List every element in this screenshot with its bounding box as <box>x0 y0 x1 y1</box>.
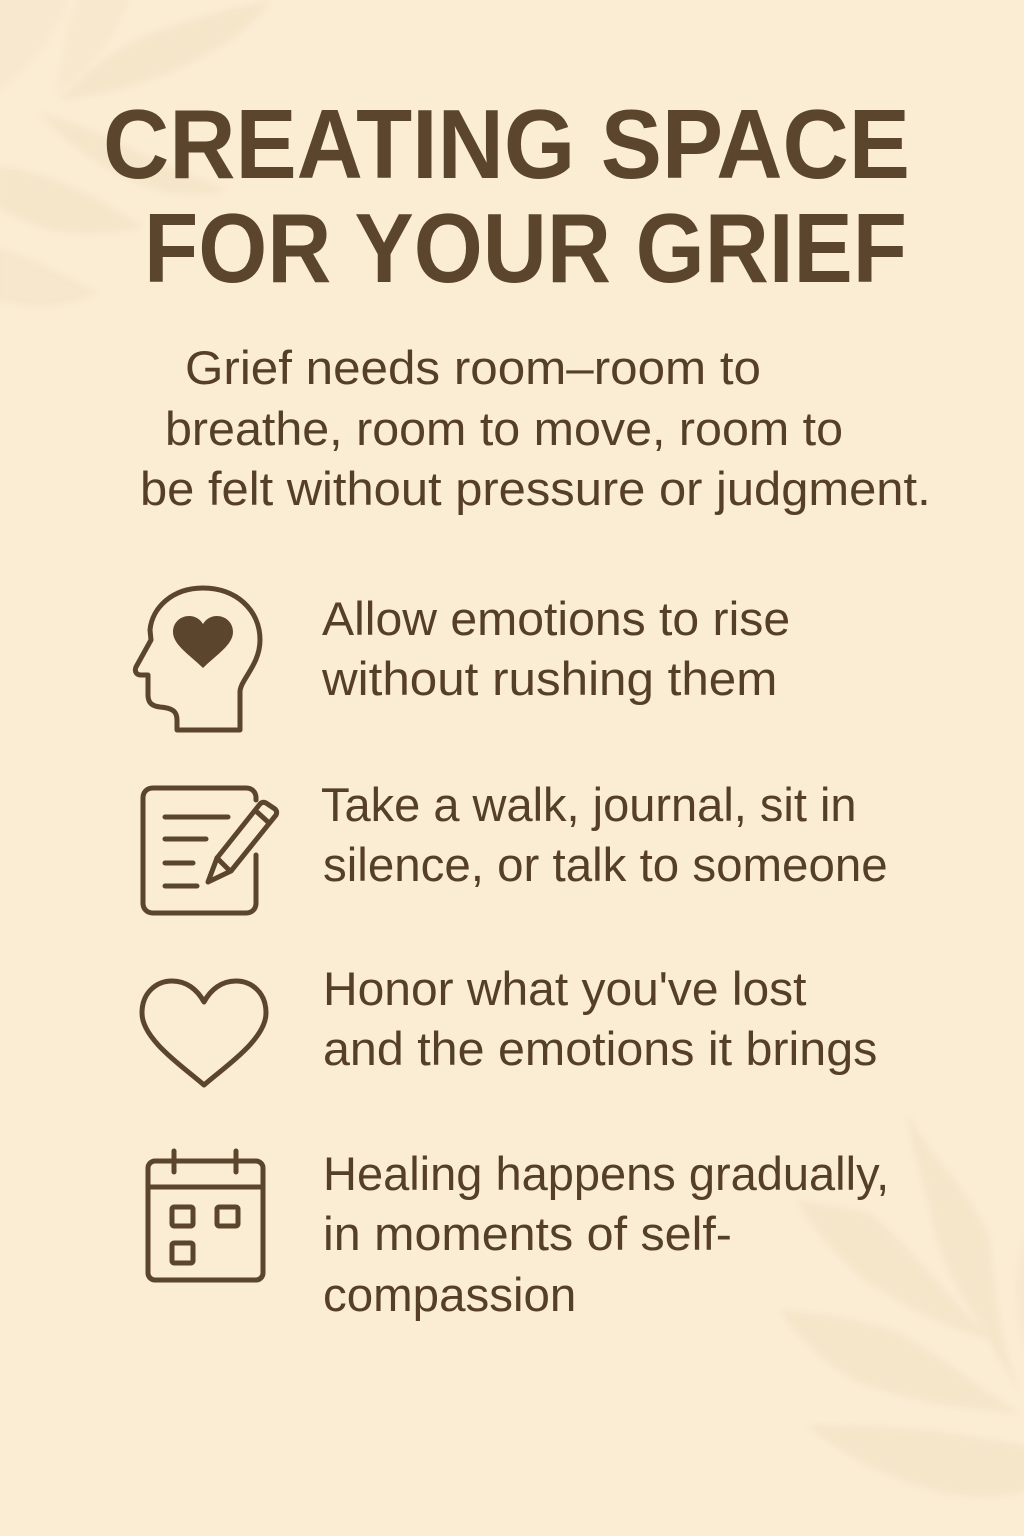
title: FOR YOUR GRIEF <box>144 193 907 303</box>
text: honor: Honor what you've lost <box>323 962 806 1015</box>
text: take a walk: Take a walk, journal, sit in <box>321 778 857 831</box>
text: honor <box>256 962 877 1075</box>
text: healing: in moments of self- <box>323 1207 732 1260</box>
text: healing: Healing happens gradually, <box>323 1147 889 1200</box>
icon: calendar <box>146 1148 266 1282</box>
text: healing: compassion <box>323 1268 576 1321</box>
icon: journal and pen <box>140 786 280 916</box>
text: allow emotions: without rushing them <box>322 652 777 705</box>
intro text <box>140 341 931 515</box>
title: CREATING SPACE <box>103 89 910 199</box>
icon: heart <box>140 978 268 1088</box>
text: take a walk: silence, or talk to someone <box>323 838 888 891</box>
text: honor: and the emotions it brings <box>323 1022 877 1075</box>
text: take a walk <box>140 778 888 912</box>
text: healing <box>150 1147 889 1321</box>
title <box>103 89 910 303</box>
text: allow emotions: Allow emotions to rise <box>322 592 790 645</box>
intro text: breathe, room to move, room to <box>165 402 843 455</box>
icon: head with heart <box>132 586 262 732</box>
intro text: be felt without pressure or judgment. <box>140 462 931 515</box>
text: allow emotions <box>132 592 790 715</box>
intro text: Grief needs room–room to <box>185 341 761 394</box>
